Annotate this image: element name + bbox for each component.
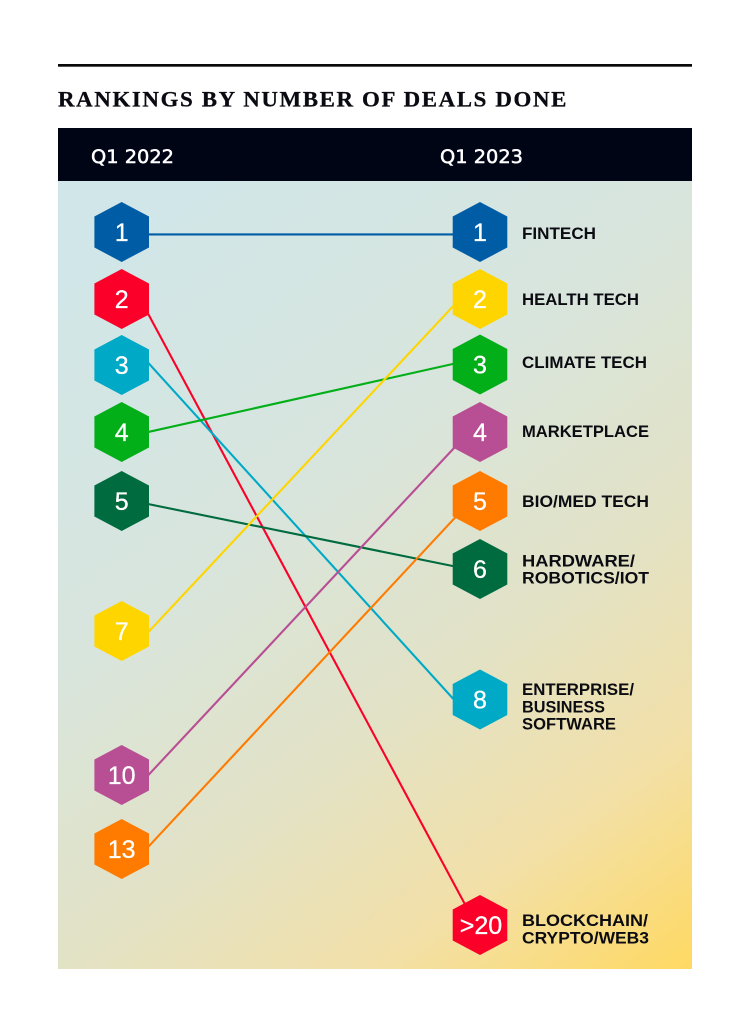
label: health tech: HEALTH TECH	[522, 290, 639, 309]
hex: right 3	[453, 334, 507, 394]
connector lines	[140, 234, 471, 915]
hex: left 4: 4	[115, 419, 129, 447]
label: hardware/robotics/iot: HARDWARE/	[522, 552, 635, 570]
hex: right 6	[453, 539, 507, 599]
hex: left 1: 1	[115, 219, 129, 247]
hex: left 1	[94, 202, 149, 262]
hex: left 13: 13	[108, 836, 136, 864]
hex: right 1: 1	[473, 219, 487, 247]
line: blockchain	[144, 307, 471, 915]
hex: right 3: 3	[473, 352, 487, 380]
label: climate tech: CLIMATE TECH	[522, 353, 647, 372]
label: fintech: FINTECH	[522, 224, 596, 243]
line: bio/med tech	[140, 510, 462, 856]
hex: left 5	[94, 471, 149, 531]
hex: left 3: 3	[115, 352, 129, 380]
label: enterprise/business software	[522, 680, 634, 734]
label: blockchain/crypto/web3: CRYPTO/WEB3	[522, 928, 649, 948]
label: blockchain/crypto/web3: BLOCKCHAIN/	[522, 911, 648, 930]
hex: left 3	[94, 335, 149, 395]
column heading: Q1 2022: Q1 2022	[91, 146, 174, 168]
label: marketplace: MARKETPLACE	[522, 422, 649, 441]
label: enterprise/business software: ENTERPRISE/	[522, 680, 634, 699]
line: climate tech	[140, 362, 460, 434]
header bar	[58, 128, 692, 181]
hex: left 7	[94, 601, 149, 661]
label: enterprise/business software: SOFTWARE	[522, 714, 616, 734]
hex: right 2: 2	[473, 286, 487, 314]
line: enterprise software	[140, 354, 462, 708]
column heading: Q1 2023: Q1 2023	[440, 146, 523, 168]
hex: left 4	[94, 402, 149, 462]
title: RANKINGS BY NUMBER OF DEALS DONE	[58, 86, 568, 112]
hex: right 4	[453, 402, 507, 462]
hex: left 2: 2	[115, 286, 129, 314]
label: enterprise/business software: BUSINESS	[522, 698, 605, 716]
hex: right 8	[453, 670, 507, 730]
panel: chart background	[58, 181, 692, 969]
label: bio/med tech: BIO/MED TECH	[522, 492, 649, 511]
left hexagons: Q1 2022 ranks	[94, 202, 149, 879]
hex: right 6: 6	[473, 556, 487, 584]
label: hardware/robotics/iot	[522, 552, 650, 588]
right hexagons: Q1 2023 ranks	[453, 202, 507, 955]
hex: right >20	[453, 895, 507, 955]
hex: left 10: 10	[108, 762, 136, 790]
hex: right 2	[453, 269, 507, 329]
hex: left 7: 7	[115, 618, 129, 646]
line: marketplace	[140, 440, 462, 784]
top rule	[58, 64, 692, 67]
hex: right >20: >20	[460, 912, 502, 940]
hex: left 2	[94, 269, 149, 329]
hex: left 10	[94, 745, 149, 805]
line: hardware	[140, 502, 460, 568]
hex: right 1	[453, 202, 507, 262]
hex: right 5: 5	[473, 488, 487, 516]
line: health tech	[140, 297, 462, 641]
sector labels	[522, 224, 650, 948]
hex: right 4: 4	[473, 419, 487, 447]
label: blockchain/crypto/web3	[522, 911, 649, 948]
hex: right 5	[453, 471, 507, 531]
line: fintech	[140, 233, 460, 235]
hex: left 5: 5	[115, 488, 129, 516]
label: hardware/robotics/iot: ROBOTICS/IOT	[522, 568, 650, 588]
hex: right 8: 8	[473, 686, 487, 714]
hex: left 13	[94, 819, 149, 879]
